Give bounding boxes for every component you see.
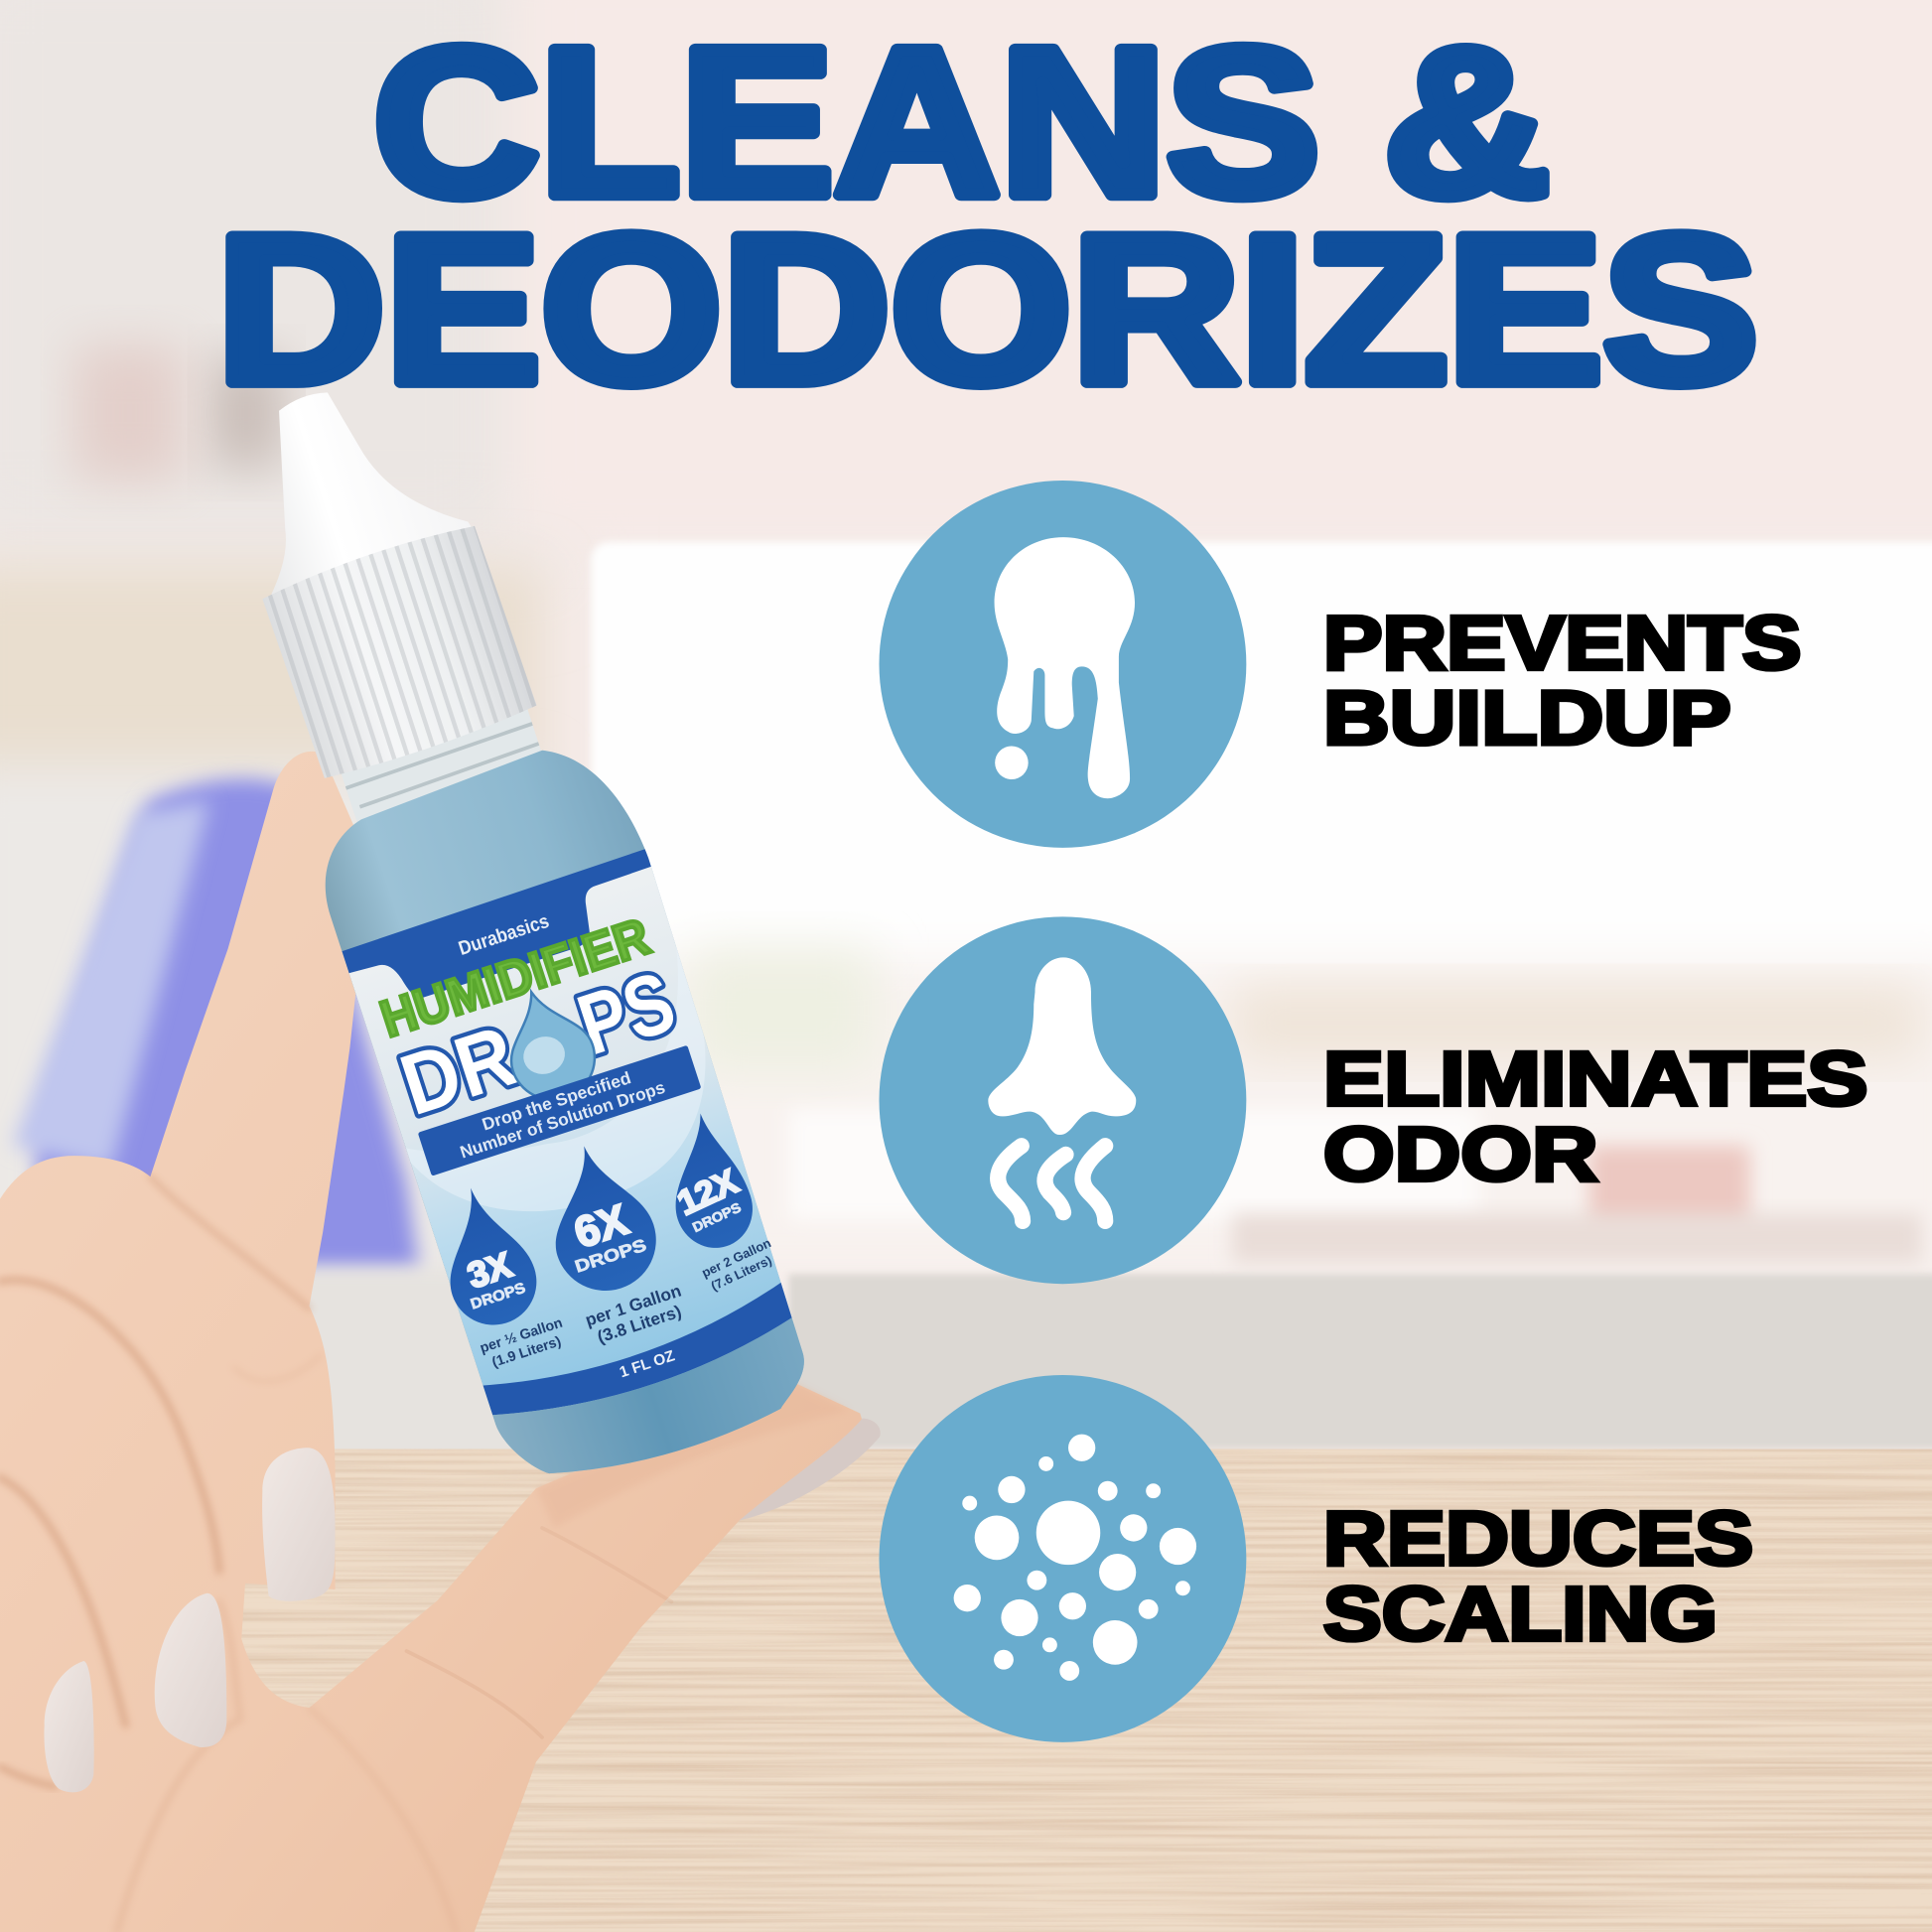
drop: 3x: DROPS: [469, 1281, 528, 1313]
bottle: [262, 393, 804, 1473]
ribbon: Drop the Specified: [480, 1067, 633, 1135]
dosage text: per ½ Gallon: [479, 1315, 565, 1357]
water swirl: [406, 949, 705, 1211]
label: prevents buildup: PREVENTS: [1323, 601, 1801, 686]
dosage text: per 1 Gallon: [583, 1281, 684, 1330]
drop: 3x: [423, 1177, 548, 1336]
cap: [207, 357, 539, 782]
drop: 12x: 12X: [672, 1163, 744, 1223]
label: prevents buildup: [1323, 601, 1801, 761]
drop: 6x: 6X: [569, 1196, 633, 1258]
icon circle: reduces scaling: [880, 1375, 1246, 1742]
product name: drops: DR: [389, 1008, 527, 1134]
brand name: Durabasics: [456, 910, 552, 960]
title: [216, 4, 1758, 427]
product name: drops: PS: [567, 953, 686, 1073]
product name: drops: [389, 953, 687, 1134]
bottle body: [302, 730, 826, 1502]
drop: 12x: [649, 1107, 762, 1258]
hand: [0, 752, 865, 1932]
icon: thumb nail: [740, 1418, 881, 1520]
icon circle: eliminates odor: [880, 916, 1246, 1284]
volume text: 1 FL OZ: [618, 1347, 677, 1381]
label: reduces scaling: [1323, 1496, 1753, 1657]
dosage text: (3.8 Liters): [595, 1301, 684, 1347]
label: eliminates odor: ELIMINATES: [1323, 1036, 1867, 1122]
bottom glass: [492, 1318, 804, 1473]
title: DEODORIZES: [216, 192, 1758, 427]
dosage text: (1.9 Liters): [490, 1333, 563, 1371]
bottle neck: [339, 704, 546, 828]
drop: 3x: 3X: [463, 1244, 516, 1296]
dosage text: per 2 Gallon: [699, 1235, 773, 1281]
drop: 12x: DROPS: [690, 1199, 744, 1235]
dosage text: [475, 1235, 785, 1382]
product name: humidifier: HUMIDIFIER: [374, 908, 656, 1048]
label: [342, 849, 804, 1473]
label blue bottom band: [483, 1283, 792, 1416]
label: eliminates odor: ODOR: [1323, 1112, 1598, 1197]
drop: 6x: [528, 1133, 669, 1304]
label: reduces scaling: REDUCES: [1323, 1496, 1753, 1582]
title: CLEANS &: [373, 4, 1550, 239]
icon: water drop: [491, 979, 606, 1111]
hand creases and shading: [0, 1176, 671, 1932]
icon circle: prevents buildup: [880, 481, 1246, 848]
label: prevents buildup: BUILDUP: [1323, 676, 1731, 761]
label: eliminates odor: [1323, 1036, 1867, 1197]
label blue top band: [342, 849, 651, 998]
ribbon: [418, 1045, 701, 1176]
label: reduces scaling: SCALING: [1323, 1572, 1718, 1657]
ribbon: Number of Solution Drops: [458, 1077, 667, 1163]
icon: nails: [44, 1448, 336, 1792]
drop: 6x: DROPS: [572, 1235, 648, 1277]
dosage text: (7.6 Liters): [709, 1252, 774, 1294]
